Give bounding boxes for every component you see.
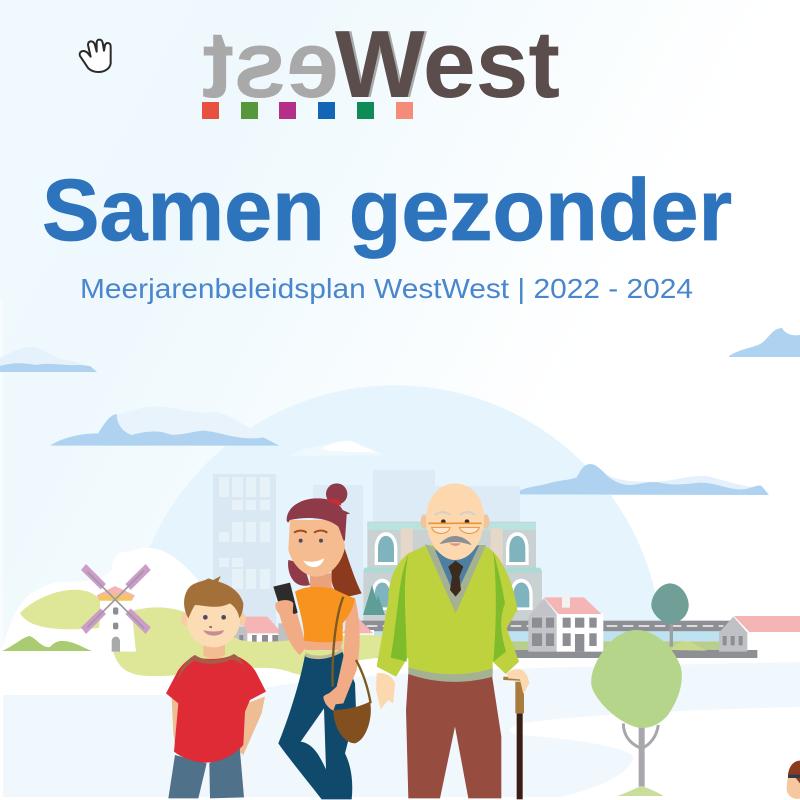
logo: West: West <box>335 11 560 118</box>
house: white with pink roof <box>528 595 603 652</box>
large tree <box>591 630 682 796</box>
subtitle: Meerjarenbeleidsplan WestWest | 2022 - 2024 <box>80 273 693 304</box>
logo <box>202 11 560 119</box>
shrubs <box>2 636 92 651</box>
person: boy <box>166 576 266 798</box>
background towers <box>313 470 520 640</box>
house: behind girl <box>278 617 374 652</box>
cloud: top right <box>729 328 800 357</box>
boy hair <box>184 576 243 618</box>
girl phone <box>273 583 298 614</box>
man tie <box>448 561 463 597</box>
man head <box>421 483 489 560</box>
man left hand <box>376 673 395 709</box>
cloud: mid left <box>50 406 279 446</box>
girl face details <box>294 531 327 567</box>
cloud: top left <box>0 347 97 372</box>
girl arms <box>277 598 360 705</box>
boy shirt <box>166 655 266 763</box>
windmill sails <box>81 564 151 634</box>
girl midriff <box>304 640 343 650</box>
ground shapes <box>0 548 800 797</box>
green hill behind windmill <box>20 590 100 629</box>
man cane <box>503 678 525 799</box>
boy shorts <box>168 743 244 798</box>
girl neck <box>305 573 337 593</box>
background dome <box>128 385 662 700</box>
road <box>360 621 757 658</box>
boy neck <box>203 640 225 659</box>
small tree: teal <box>651 583 707 651</box>
girl belt <box>305 648 342 659</box>
girl hair <box>287 483 350 541</box>
girl bag strap <box>333 597 371 703</box>
city skyline <box>213 470 800 658</box>
girl hair back <box>288 560 310 586</box>
house: grey right <box>719 616 800 652</box>
pine trees <box>363 585 385 615</box>
person: girl <box>273 483 371 799</box>
logo: colour squares <box>202 102 413 119</box>
house: left with pink roof <box>227 617 282 652</box>
boy arms <box>172 697 185 753</box>
girl head <box>288 520 345 577</box>
windmill cap <box>97 586 135 601</box>
girl top <box>295 587 355 642</box>
windmill <box>81 564 151 652</box>
cloud: small white <box>290 441 383 456</box>
pale snow band <box>3 662 800 797</box>
boy face details <box>203 615 226 636</box>
person at bottom right edge <box>787 761 800 799</box>
man right hand <box>507 669 529 694</box>
girl bag <box>333 702 371 743</box>
cloud: right <box>513 464 769 495</box>
person: older man <box>376 483 529 799</box>
ground <box>0 652 800 800</box>
white hill left <box>0 548 198 660</box>
logo: mirrored West: West <box>202 11 427 118</box>
museum building <box>363 522 542 622</box>
man collar v-neck <box>425 544 486 613</box>
girl hand <box>323 693 338 711</box>
man sweater <box>377 545 519 682</box>
boy head <box>181 593 246 647</box>
girl phone hand <box>275 600 293 616</box>
windmill body <box>97 602 136 652</box>
green meadow <box>111 607 400 676</box>
man trousers <box>406 673 501 798</box>
icon: hand cursor <box>80 40 111 72</box>
man face details <box>428 512 482 546</box>
tower with windows <box>213 474 276 652</box>
girl jeans <box>278 650 356 799</box>
title: Samen gezonder <box>42 162 732 259</box>
